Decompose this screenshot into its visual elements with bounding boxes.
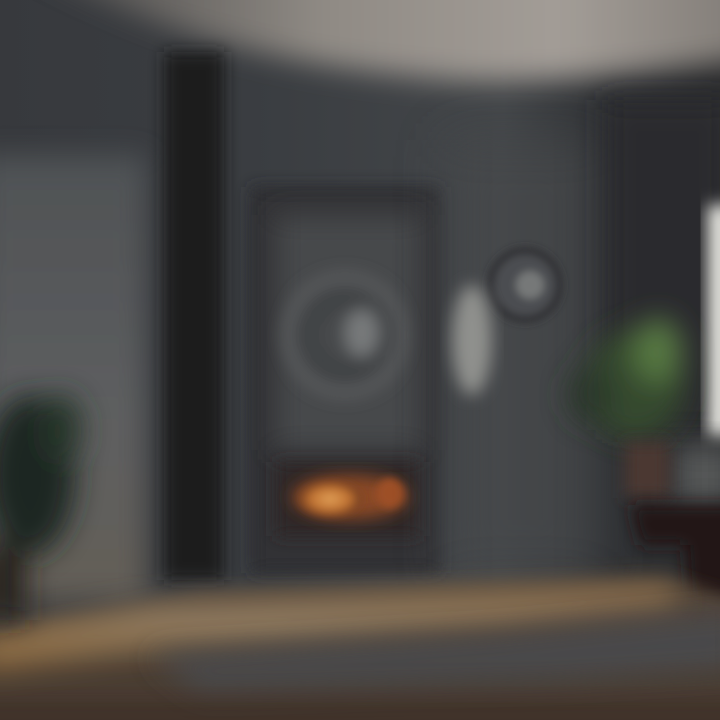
panel face <box>276 215 420 450</box>
wall clock <box>491 251 559 319</box>
right dark wall <box>605 100 720 430</box>
plant right <box>568 318 685 440</box>
fireplace opening <box>276 462 420 536</box>
side table right <box>630 505 720 630</box>
lit floor planks <box>0 584 680 672</box>
dark column <box>164 52 224 580</box>
plant left <box>0 394 82 620</box>
circle ornament <box>287 277 403 393</box>
panel frame <box>254 190 438 570</box>
floor <box>0 578 720 720</box>
window lower glow <box>675 445 720 505</box>
ceiling <box>0 0 720 81</box>
fire core <box>298 481 362 517</box>
rug <box>150 612 720 692</box>
plant pot right <box>625 442 669 498</box>
floor bottom shade <box>0 700 720 720</box>
white vase <box>452 285 492 395</box>
central fireplace panel <box>254 190 438 570</box>
right wall tile section <box>448 140 598 580</box>
window <box>708 205 720 437</box>
left wall panel <box>0 155 146 600</box>
fire glow <box>292 475 408 519</box>
